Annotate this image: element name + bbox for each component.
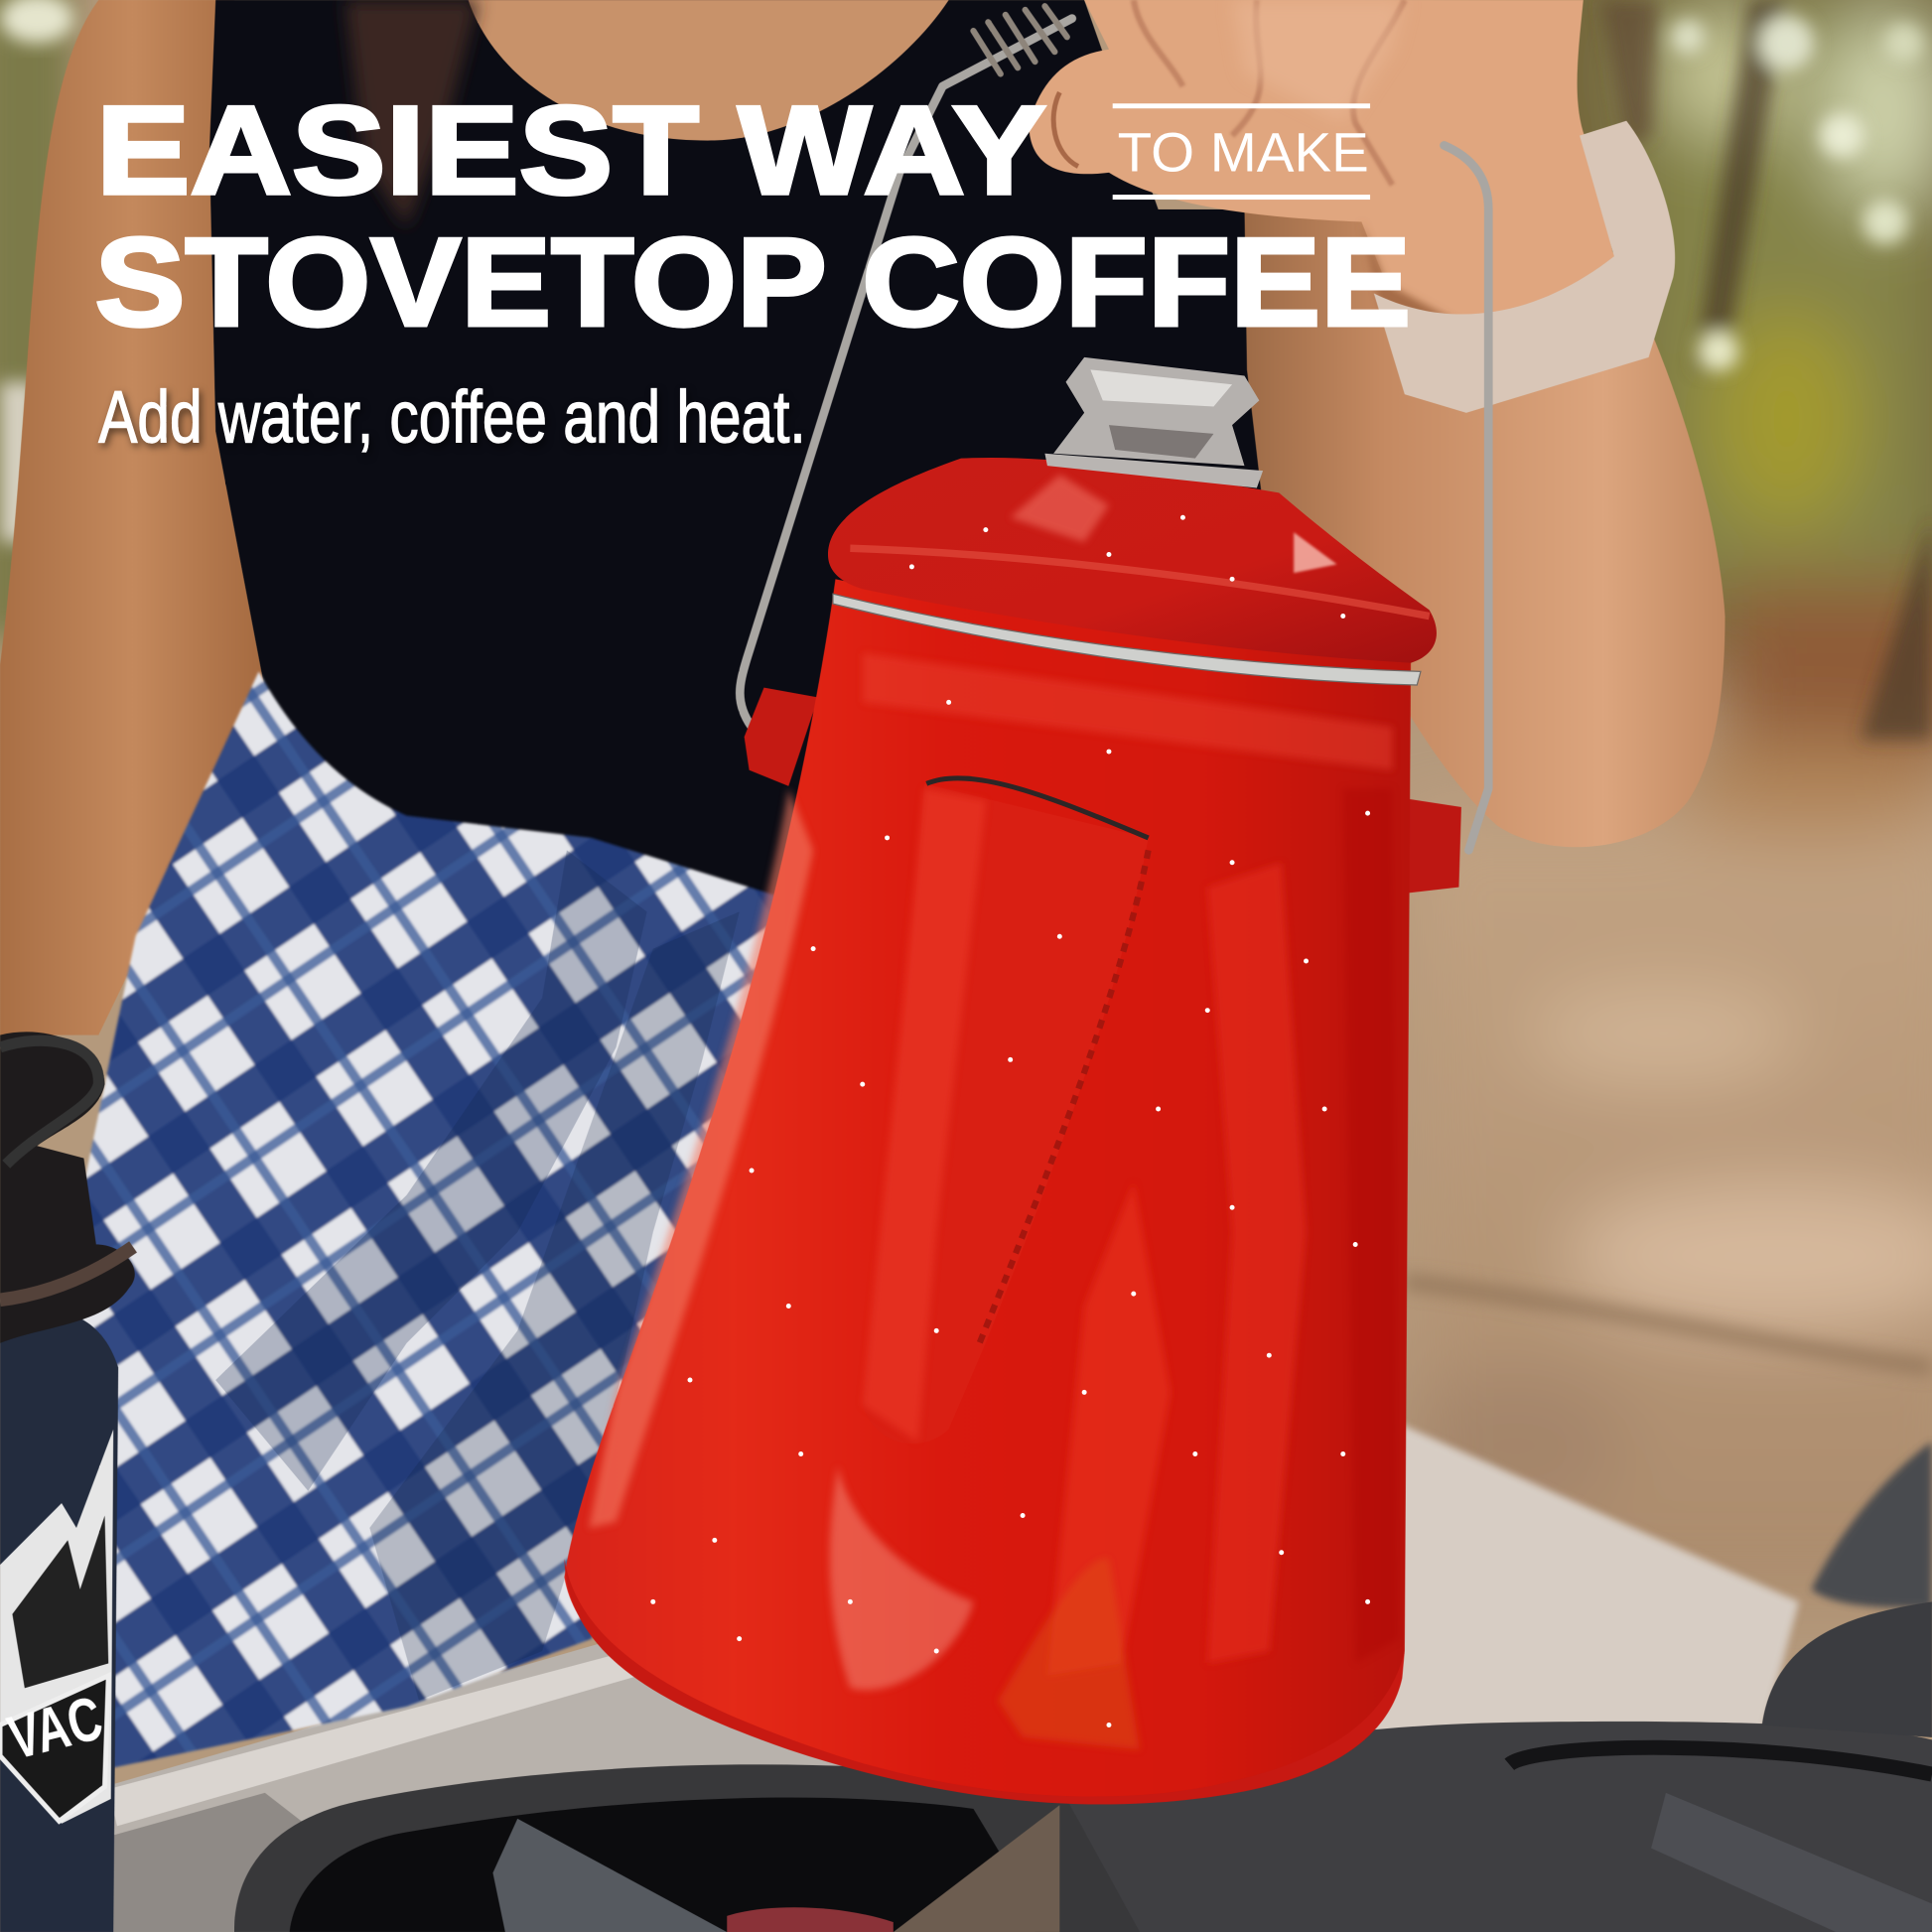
person: torso and arms xyxy=(0,0,1725,1035)
bottom rim xyxy=(564,1559,1405,1804)
handle coil spring xyxy=(973,6,1067,73)
to make tag with rules xyxy=(1113,103,1370,200)
upper arm right xyxy=(1238,198,1725,847)
pot lid xyxy=(828,458,1437,663)
pot body xyxy=(564,579,1411,1799)
stove grate and burner xyxy=(234,1442,1932,1932)
table surface xyxy=(98,1423,1799,1932)
subheading: Add water, coffee and heat. xyxy=(98,376,806,459)
plaid shirt tied at waist xyxy=(73,671,788,1768)
headline line one: EASIEST WAY xyxy=(96,79,1046,220)
smart watch band xyxy=(1374,121,1675,413)
hand gripping handle xyxy=(1029,0,1614,327)
bottle logo lettering: VAC xyxy=(2,1684,109,1773)
enamel white speckles xyxy=(650,515,1370,1727)
water bottle xyxy=(0,1032,135,1932)
pot highlights xyxy=(589,653,1399,1749)
wire bail handle xyxy=(740,6,1488,850)
headline xyxy=(95,79,1411,352)
steel rim xyxy=(833,594,1421,685)
pot spout xyxy=(863,778,1149,1444)
to make tag with rules: TO MAKE xyxy=(1118,121,1369,184)
coffee pot xyxy=(564,357,1461,1804)
pot side lugs xyxy=(745,688,1461,894)
glass lid knob xyxy=(1044,357,1263,487)
headline line two: STOVETOP COFFEE xyxy=(95,211,1411,352)
